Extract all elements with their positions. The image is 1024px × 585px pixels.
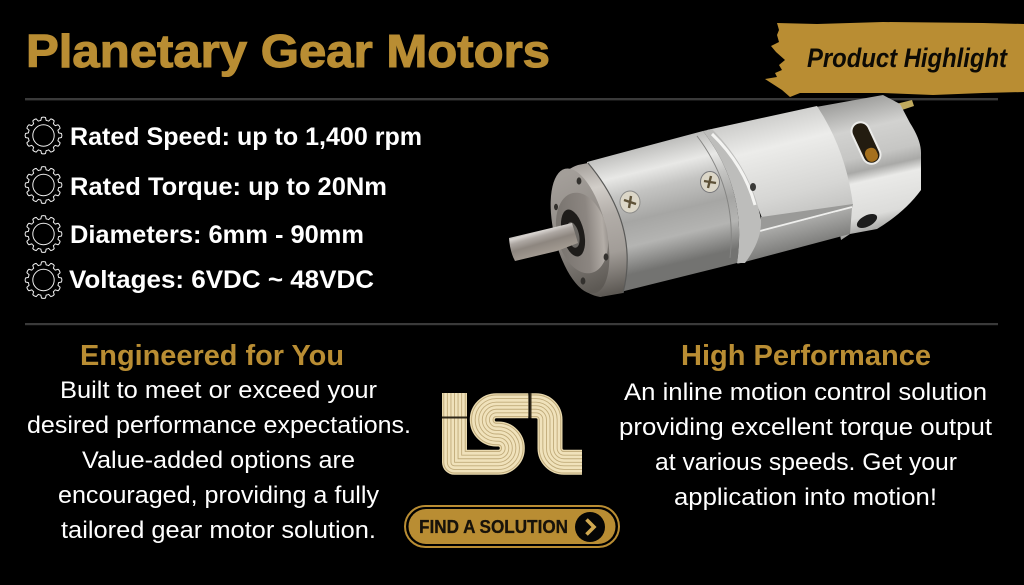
bearing inner bbox=[564, 221, 582, 249]
spec: rated speed: Rated Speed: up to 1,400 rpm bbox=[70, 123, 422, 151]
button: find a solution bbox=[405, 506, 619, 547]
heading: engineered for you: Engineered for You bbox=[80, 340, 344, 372]
spec: voltages: Voltages: 6VDC ~ 48VDC bbox=[69, 266, 374, 294]
bearing bbox=[557, 207, 589, 259]
flange groove bbox=[588, 163, 627, 293]
icon: chevron bbox=[575, 512, 605, 542]
front face chamfer bbox=[552, 163, 627, 297]
spec: diameters: Diameters: 6mm - 90mm bbox=[70, 221, 364, 249]
body text right bbox=[619, 379, 992, 511]
body text right: providing excellent torque output bbox=[619, 414, 992, 441]
flat face bbox=[540, 163, 620, 299]
spec: rated torque bbox=[25, 167, 387, 203]
heading: high performance: High Performance bbox=[681, 340, 931, 372]
ventilation slot bbox=[847, 118, 885, 168]
lower hole bbox=[855, 211, 879, 231]
spec list bbox=[25, 117, 422, 298]
spec: diameters bbox=[25, 216, 364, 252]
mounting holes bbox=[554, 177, 608, 285]
collar ring bbox=[703, 129, 761, 263]
motor photo illustration bbox=[509, 95, 921, 299]
body text left: desired performance expectations. bbox=[27, 412, 411, 439]
sleeve notch bbox=[759, 204, 853, 232]
spec: voltages bbox=[25, 262, 374, 298]
collar dark spot bbox=[750, 183, 756, 191]
title: Planetary Gear Motors bbox=[26, 25, 550, 77]
terminal tab bbox=[896, 100, 914, 111]
body text right: at various speeds. Get your bbox=[655, 449, 957, 476]
collar highlight bbox=[712, 134, 755, 205]
body text left: encouraged, providing a fully bbox=[58, 482, 380, 509]
body text right: An inline motion control solution bbox=[624, 379, 987, 406]
screw 1 bbox=[620, 191, 640, 213]
rear motor can bbox=[816, 95, 921, 240]
output shaft bbox=[509, 223, 578, 261]
sleeve step highlight bbox=[760, 207, 852, 231]
column: engineered for you bbox=[27, 340, 411, 544]
header divider bbox=[25, 98, 998, 100]
lower motor body bbox=[737, 208, 852, 264]
motor sleeve bbox=[707, 106, 853, 218]
column: high performance bbox=[619, 340, 992, 511]
body text right: application into motion! bbox=[674, 484, 937, 511]
section divider bbox=[25, 323, 998, 325]
button: find a solution: FIND A SOLUTION bbox=[419, 517, 568, 537]
body text left bbox=[27, 377, 411, 544]
body text left: tailored gear motor solution. bbox=[61, 517, 376, 544]
gearbox housing bbox=[587, 131, 739, 297]
spec: rated speed bbox=[25, 117, 422, 154]
screw 2 bbox=[700, 172, 720, 192]
logo: ISL bbox=[442, 393, 582, 462]
spec: rated torque: Rated Torque: up to 20Nm bbox=[70, 173, 387, 201]
body text left: Built to meet or exceed your bbox=[60, 377, 377, 404]
front hub bbox=[548, 187, 616, 279]
collar groove bbox=[697, 136, 731, 258]
body text left: Value-added options are bbox=[82, 447, 355, 474]
banner: product highlight bbox=[765, 22, 1024, 97]
